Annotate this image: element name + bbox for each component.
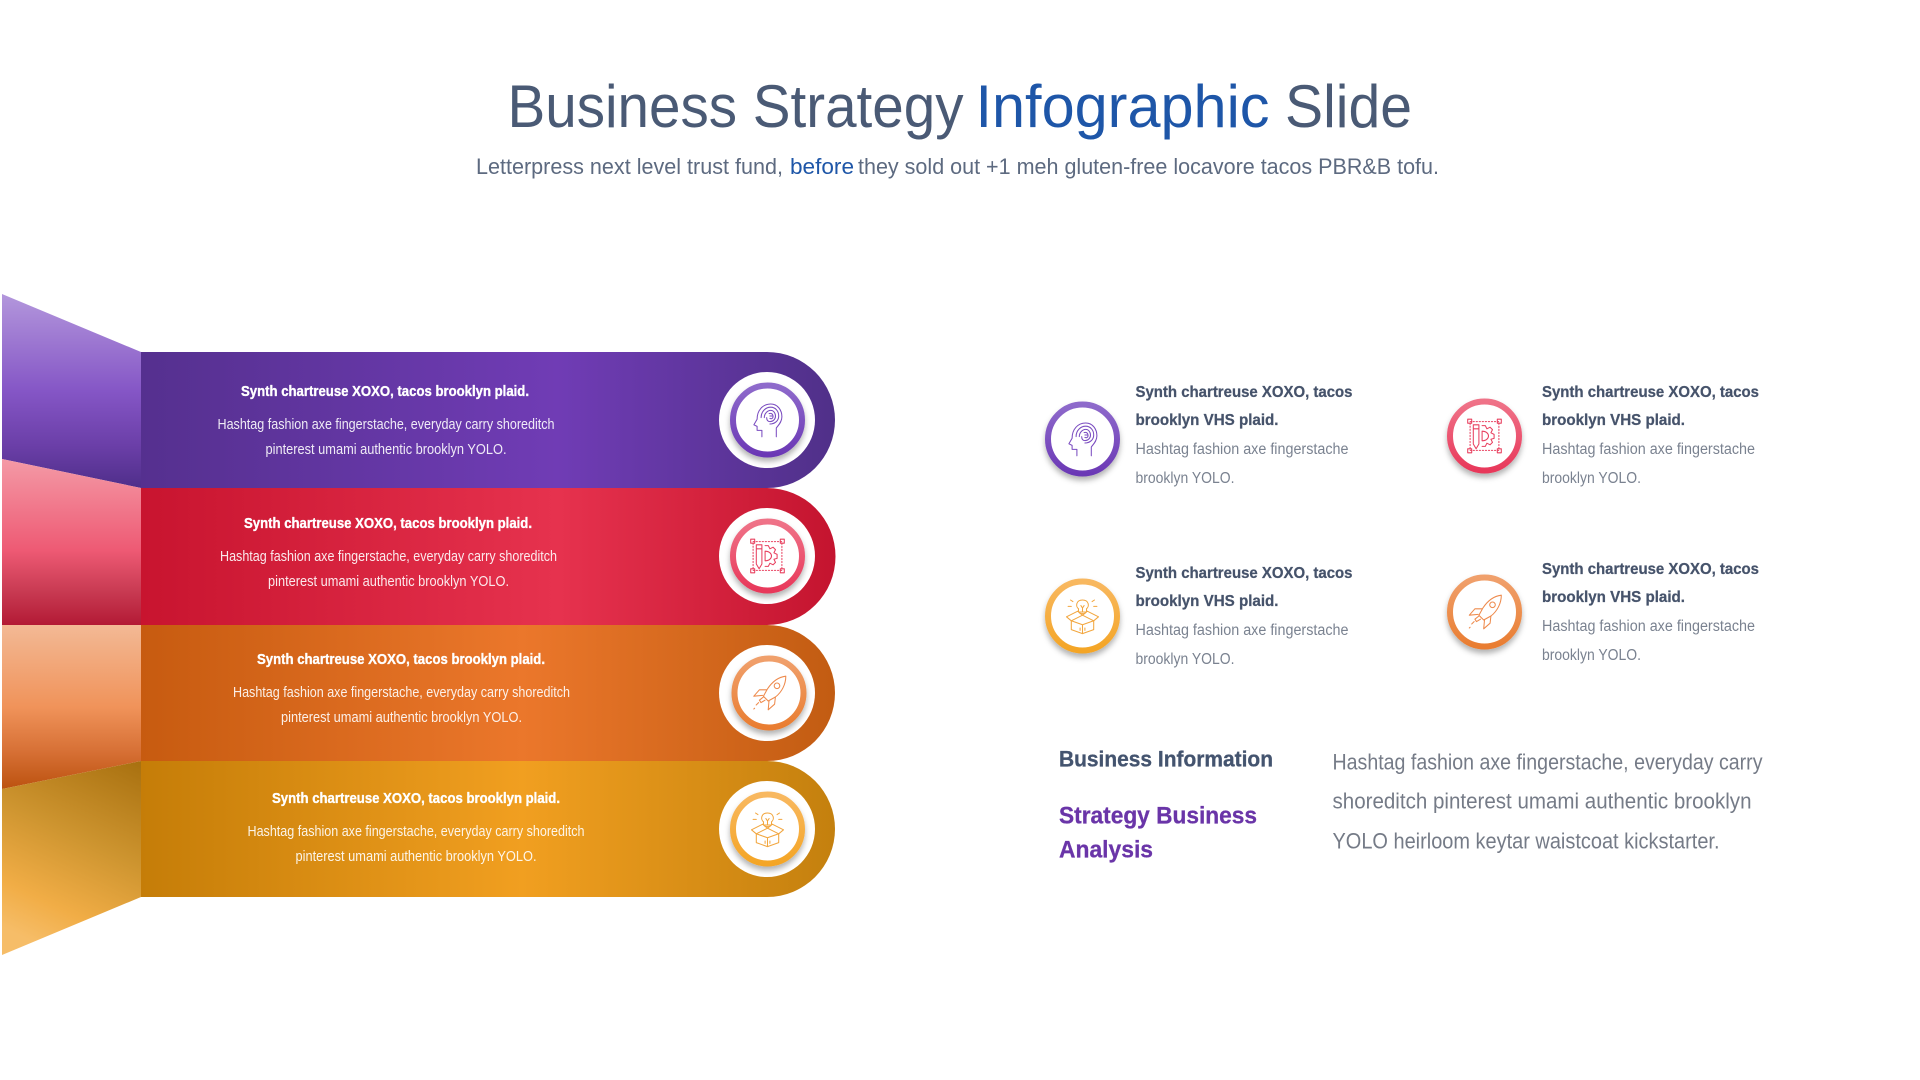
- panel: funnel left wedges: [2, 294, 141, 955]
- item: bottom left, idea box: [1048, 565, 1353, 668]
- icon ring: design gear: [733, 522, 802, 590]
- text: purple bar: pinterest umami authentic brooklyn YOLO.: [266, 442, 506, 458]
- heading: business information: Business Information: [1059, 746, 1273, 772]
- item: bottom left, idea box: brooklyn YOLO.: [1136, 651, 1234, 668]
- heading: strategy business analysis: Strategy Business: [1059, 802, 1257, 830]
- text: purple bar: [218, 384, 554, 458]
- text: orange bar: [233, 652, 570, 726]
- item: top left, head maze: [1048, 384, 1353, 487]
- panel: yellow bar: [141, 761, 835, 897]
- subtitle: Letterpress next level trust fund,: [476, 154, 783, 179]
- panel: red bar: [141, 488, 836, 625]
- text block: business paragraph: Hashtag fashion axe fingerstache, everyday carry: [1332, 750, 1762, 774]
- text: orange bar: pinterest umami authentic brooklyn YOLO.: [281, 710, 522, 726]
- item: top right, design gear: Synth chartreuse XOXO, tacos: [1542, 384, 1759, 401]
- text: purple bar: Hashtag fashion axe fingerstache, everyday carry shoreditch: [218, 417, 554, 433]
- item: top right, design gear: brooklyn VHS plaid.: [1542, 412, 1685, 429]
- text: yellow bar: [248, 791, 584, 865]
- item: bottom left, idea box: Synth chartreuse XOXO, tacos: [1136, 565, 1353, 582]
- wedge: yellow: [2, 761, 141, 955]
- item: top right, design gear: [1450, 384, 1759, 487]
- subtitle: they sold out +1 meh gluten-free locavore tacos PBR&B tofu.: [858, 154, 1439, 179]
- text: purple bar: Synth chartreuse XOXO, tacos brooklyn plaid.: [241, 384, 529, 400]
- item: bottom right, rocket: brooklyn VHS plaid.: [1542, 589, 1685, 606]
- item: bottom right, rocket: [1450, 561, 1759, 664]
- text: yellow bar: pinterest umami authentic brooklyn YOLO.: [296, 849, 536, 865]
- subtitle: [476, 154, 1439, 179]
- text: red bar: Synth chartreuse XOXO, tacos brooklyn plaid.: [244, 516, 532, 532]
- text: orange bar: Hashtag fashion axe fingerstache, everyday carry shoreditch: [233, 685, 570, 701]
- item: bottom right, rocket: Hashtag fashion axe fingerstache: [1542, 618, 1755, 635]
- text block: business paragraph: [1332, 750, 1762, 854]
- wedge: orange: [2, 625, 141, 789]
- item: top left, head maze: Hashtag fashion axe fingerstache: [1136, 441, 1348, 458]
- text: red bar: Hashtag fashion axe fingerstache, everyday carry shoreditch: [220, 549, 557, 565]
- panel: orange bar: [141, 625, 835, 761]
- item: top right, design gear: brooklyn YOLO.: [1542, 470, 1641, 487]
- item: bottom left, idea box: Hashtag fashion axe fingerstache: [1136, 622, 1348, 639]
- title: Business Strategy: [508, 73, 964, 140]
- item: top left, head maze: brooklyn YOLO.: [1136, 470, 1234, 487]
- text: yellow bar: Synth chartreuse XOXO, tacos brooklyn plaid.: [272, 791, 560, 807]
- item: bottom left, idea box: brooklyn VHS plaid.: [1136, 593, 1278, 610]
- title: Infographic: [976, 73, 1270, 140]
- icon ring: rocket: [734, 658, 804, 728]
- item: top right, design gear: Hashtag fashion axe fingerstache: [1542, 441, 1755, 458]
- icon ring: head maze: [733, 386, 802, 454]
- text: orange bar: Synth chartreuse XOXO, tacos brooklyn plaid.: [257, 652, 545, 668]
- title: Slide: [1285, 73, 1412, 140]
- panel: purple bar: [141, 352, 835, 488]
- title: [508, 73, 1412, 140]
- item: bottom right, rocket: brooklyn YOLO.: [1542, 647, 1641, 664]
- text block: business paragraph: YOLO heirloom keytar waistcoat kickstarter.: [1332, 828, 1720, 854]
- item: top left, head maze: Synth chartreuse XOXO, tacos: [1136, 384, 1353, 401]
- icon ring: idea box: [733, 794, 802, 864]
- heading: strategy business analysis: [1059, 802, 1257, 864]
- text: red bar: pinterest umami authentic brooklyn YOLO.: [268, 574, 509, 590]
- text: yellow bar: Hashtag fashion axe fingerstache, everyday carry shoreditch: [248, 824, 584, 840]
- text: red bar: [220, 516, 557, 590]
- item: top left, head maze: brooklyn VHS plaid.: [1136, 412, 1278, 429]
- wedge: red: [2, 459, 141, 625]
- subtitle: before: [790, 154, 854, 179]
- item: bottom right, rocket: Synth chartreuse XOXO, tacos: [1542, 561, 1759, 578]
- wedge: purple: [2, 294, 141, 488]
- heading: strategy business analysis: Analysis: [1059, 836, 1153, 864]
- text block: business paragraph: shoreditch pinterest umami authentic brooklyn: [1332, 788, 1752, 814]
